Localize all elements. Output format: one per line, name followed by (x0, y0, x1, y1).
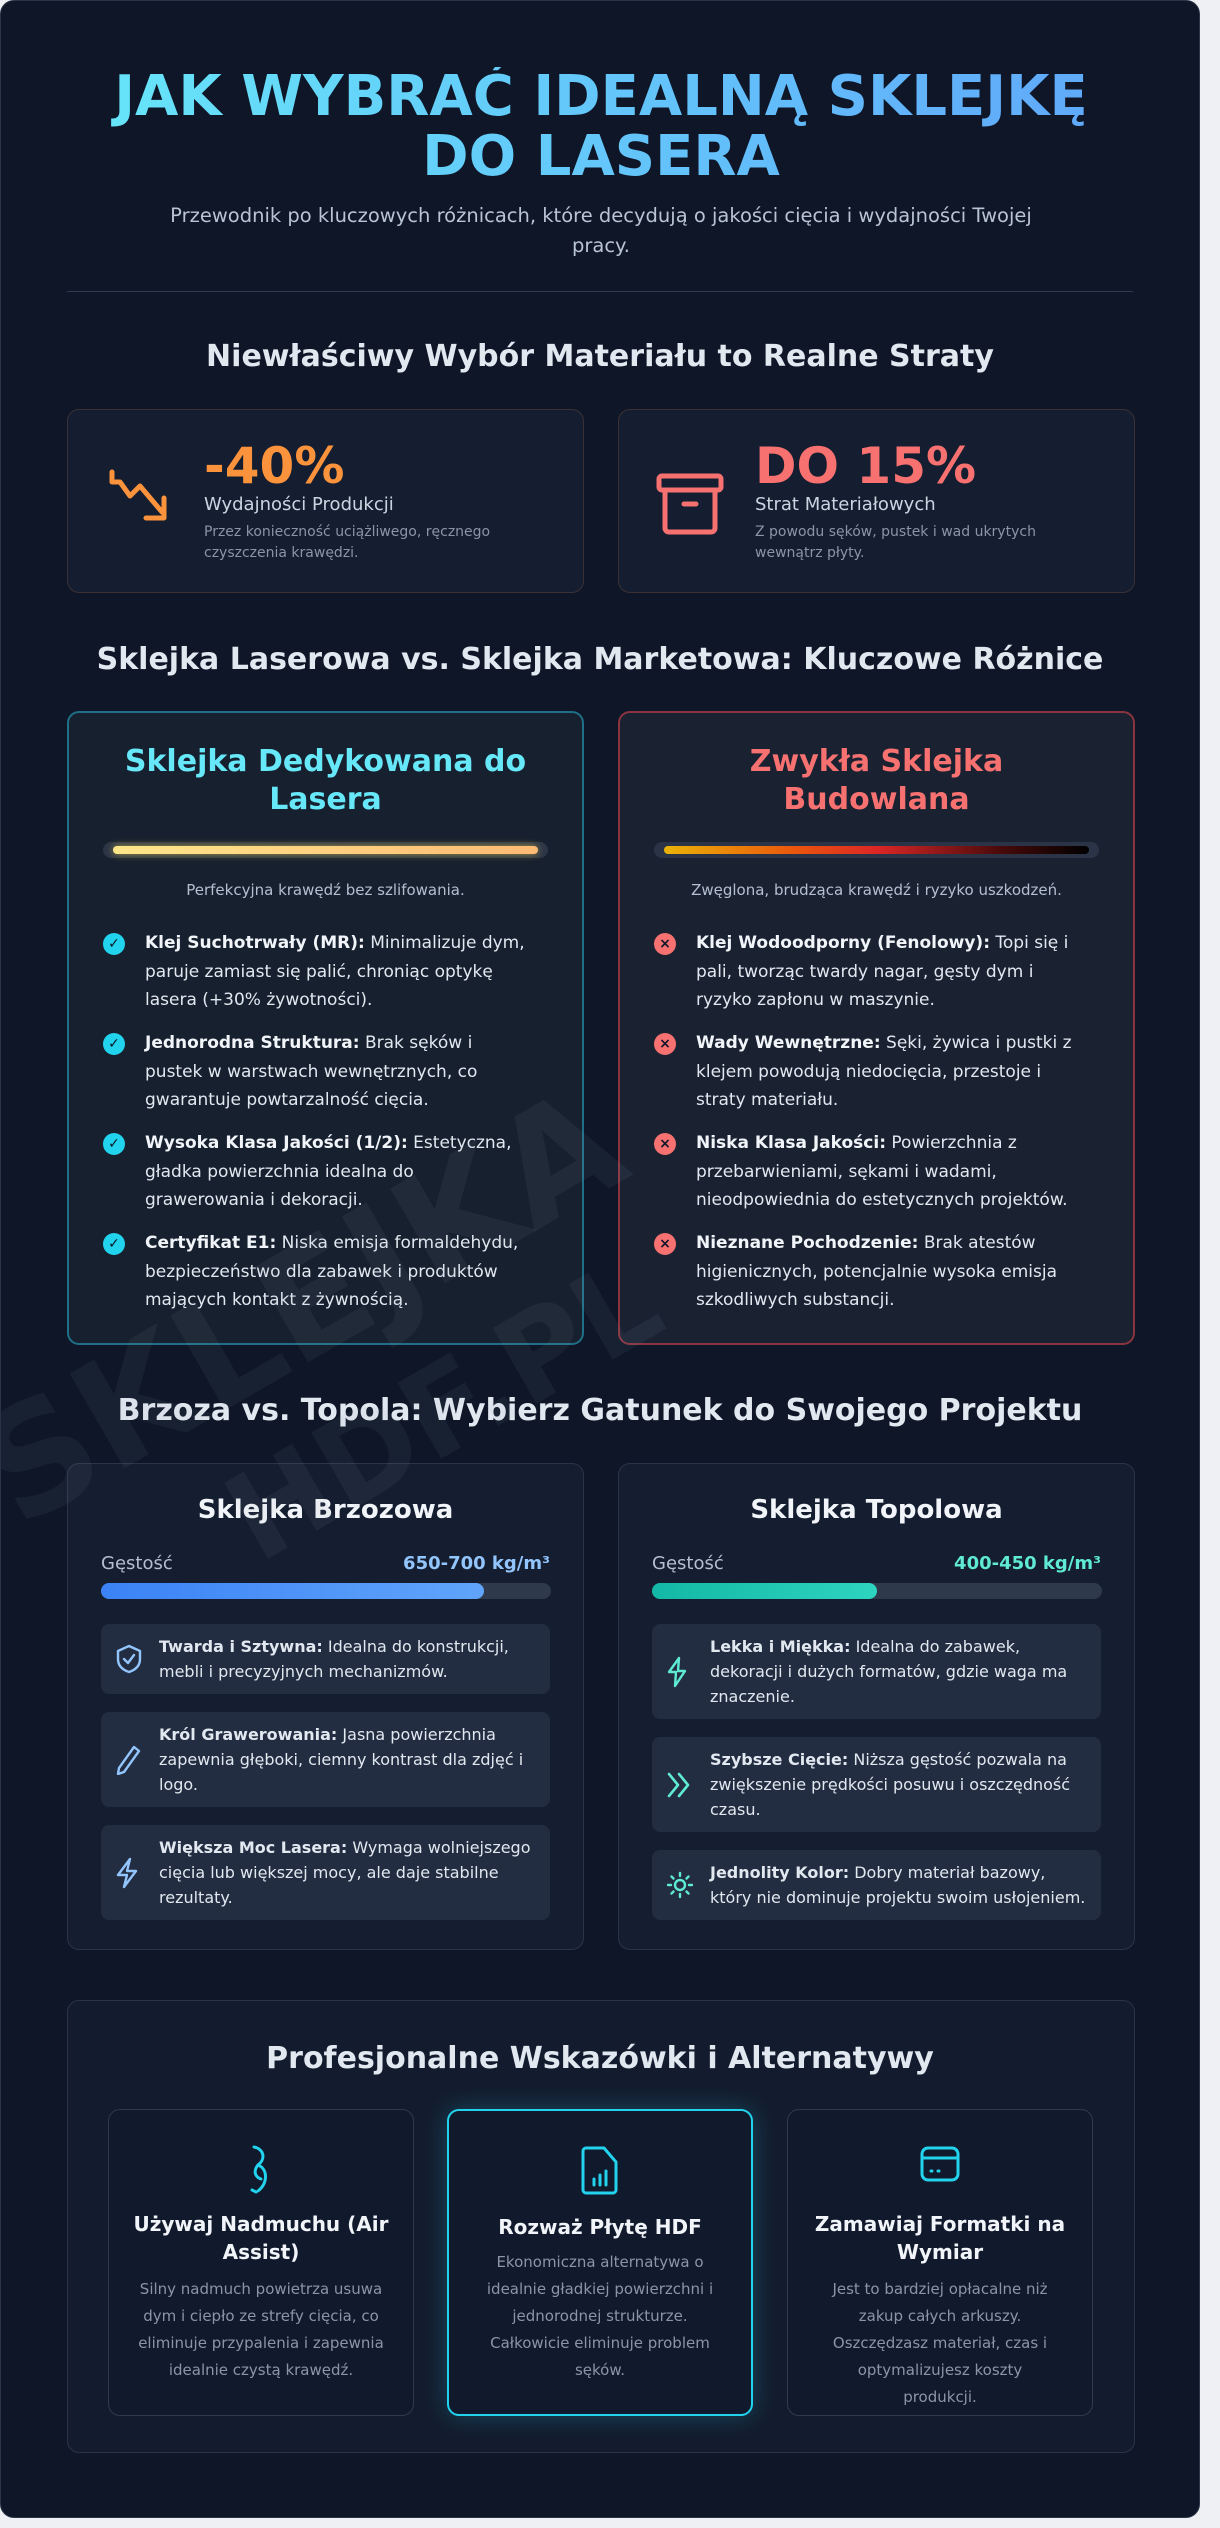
list item: Nieznane Pochodzenie: Brak atestów higienicznych, potencjalnie wysoka emisja szkodliwych substancji. (696, 1233, 1057, 1310)
heading: losses: Niewłaściwy Wybór Materiału to Realne Straty (206, 339, 994, 374)
feature: Twarda i Sztywna: Idealna do konstrukcji, mebli i precyzyjnych mechanizmów. (159, 1637, 509, 1681)
icon: trending down (110, 470, 166, 520)
panel: poplar: Sklejka Topolowa (750, 1495, 1003, 1525)
feature (101, 1825, 550, 1920)
list item: Wady Wewnętrzne: Sęki, żywica i pustki z klejem powodują niedocięcia, przestoje i straty materiału. (696, 1033, 1072, 1110)
panel: laser plywood: ✓ (108, 1136, 120, 1152)
list item: Klej Suchotrwały (MR): Minimalizuje dym, paruje zamiast się palić, chroniąc optykę lasera (+30% żywotności). (145, 933, 525, 1010)
tip card: formats: Jest to bardziej opłacalne niż zakup całych arkuszy. Oszczędzasz materiał, czas i optymalizujesz koszty produkcji. (832, 2280, 1048, 2406)
feature: Większa Moc Lasera: Wymaga wolniejszego cięcia lub większej mocy, ale daje stabilne rezultaty. (159, 1838, 530, 1907)
stat card: material loss: Z powodu sęków, pustek i wad ukrytych wewnątrz płyty. (755, 524, 1036, 561)
panel: laser plywood: Perfekcyjna krawędź bez szlifowania. (186, 881, 465, 899)
tip card: air assist: Silny nadmuch powietrza usuwa dym i ciepło ze strefy cięcia, co eliminuje przypalenia i zapewnia idealnie czystą krawędź. (138, 2280, 384, 2379)
panel: poplar (618, 1463, 1135, 1950)
stat card: productivity: Wydajności Produkcji (204, 494, 394, 515)
stat card: material loss: Strat Materiałowych (755, 494, 936, 515)
panel: construction plywood: × (659, 1236, 671, 1252)
panel: construction plywood: Zwęglona, brudząca krawędź i ryzyko uszkodzeń. (691, 881, 1062, 899)
edge bar: clean (103, 842, 548, 858)
stat card: productivity: Przez konieczność uciążliwego, ręcznego czyszczenia krawędzi. (204, 524, 490, 561)
feature: Jednolity Kolor: Dobry materiał bazowy, który nie dominuje projektu swoim usłojeniem. (710, 1863, 1085, 1907)
list item: Niska Klasa Jakości: Powierzchnia z przebarwieniami, sękami i wadami, nieodpowiednia do estetycznych projektów. (696, 1133, 1068, 1210)
feature: Szybsze Cięcie: Niższa gęstość pozwala na zwiększenie prędkości posuwu i oszczędność czasu. (710, 1750, 1070, 1819)
feature: Król Grawerowania: Jasna powierzchnia zapewnia głęboki, ciemny kontrast dla zdjęć i logo. (159, 1725, 523, 1794)
panel: birch: 650-700 kg/m³ (403, 1553, 550, 1574)
feature: Lekka i Miękka: Idealna do zabawek, dekoracji i dużych formatów, gdzie waga ma znaczenie. (710, 1637, 1067, 1706)
density bar (652, 1583, 1102, 1599)
feature (101, 1712, 550, 1807)
stat card: material loss (618, 409, 1135, 593)
tip card: HDF (447, 2109, 753, 2416)
panel: construction plywood: Budowlana (783, 782, 970, 817)
watermark: HDF.PL (203, 1232, 684, 1589)
feature (652, 1737, 1101, 1832)
feature (101, 1624, 550, 1694)
panel: laser plywood: ✓ (108, 936, 120, 952)
heading: species: Brzoza vs. Topola: Wybierz Gatunek do Swojego Projektu (118, 1393, 1082, 1428)
panel: poplar: 400-450 kg/m³ (954, 1553, 1101, 1574)
tip card: HDF: Ekonomiczna alternatywa o idealnie gładkiej powierzchni i jednorodnej strukturze. Całkowicie eliminuje problem sęków. (487, 2253, 713, 2379)
tip card: formats (787, 2109, 1093, 2416)
panel: laser plywood: ✓ (108, 1036, 120, 1052)
panel: laser plywood (67, 711, 584, 1345)
panel: tips (67, 2000, 1135, 2453)
panel: construction plywood: × (659, 936, 671, 952)
stat number: -40% (204, 437, 344, 495)
edge bar: burnt (654, 842, 1099, 858)
stat number: DO 15% (755, 437, 976, 495)
density bar (101, 1583, 551, 1599)
list item: Klej Wodoodporny (Fenolowy): Topi się i pali, tworząc twardy nagar, gęsty dym i ryzyko zapłonu w maszynie. (696, 933, 1068, 1010)
icon: card (920, 2146, 960, 2182)
title: DO LASERA (422, 124, 780, 189)
list item: Wysoka Klasa Jakości (1/2): Estetyczna, gładka powierzchnia idealna do grawerowania i dekoracji. (145, 1133, 512, 1210)
panel: laser plywood: Lasera (269, 782, 382, 817)
panel: birch: Sklejka Brzozowa (198, 1495, 453, 1525)
title (41, 67, 1161, 187)
panel: birch: Gęstość (101, 1553, 173, 1574)
feature (652, 1850, 1101, 1920)
panel: birch (67, 1463, 584, 1950)
subtitle: Przewodnik po kluczowych różnicach, które decydują o jakości cięcia i wydajności Twojej pracy. (170, 204, 1032, 257)
icon: file chart (582, 2146, 618, 2194)
panel: construction plywood (618, 711, 1135, 1345)
panel: poplar: Gęstość (652, 1553, 724, 1574)
feature (652, 1624, 1101, 1719)
panel: laser plywood: Sklejka Dedykowana do (125, 744, 526, 779)
panel: construction plywood: × (659, 1136, 671, 1152)
tip card: HDF: Rozważ Płytę HDF (498, 2215, 702, 2239)
title: JAK WYBRAĆ IDEALNĄ SKLEJKĘ (114, 64, 1088, 129)
list item: Certyfikat E1: Niska emisja formaldehydu, bezpieczeństwo dla zabawek i produktów mających kontakt z żywnością. (145, 1233, 518, 1310)
heading: tips: Profesjonalne Wskazówki i Alternatywy (266, 2041, 934, 2076)
tip card: air assist (108, 2109, 414, 2416)
heading: comparison: Sklejka Laserowa vs. Sklejka Marketowa: Kluczowe Różnice (97, 642, 1103, 677)
tip card: air assist: Używaj Nadmuchu (Air Assist) (134, 2212, 388, 2264)
panel: laser plywood: ✓ (108, 1236, 120, 1252)
panel: construction plywood: Zwykła Sklejka (750, 744, 1003, 779)
icon: air (250, 2146, 267, 2194)
stat card: productivity (67, 409, 584, 593)
icon: box (656, 474, 724, 534)
tip card: formats: Zamawiaj Formatki na Wymiar (815, 2212, 1065, 2264)
list item: Jednorodna Struktura: Brak sęków i pustek w warstwach wewnętrznych, co gwarantuje powtarzalność cięcia. (145, 1033, 477, 1110)
panel: construction plywood: × (659, 1036, 671, 1052)
